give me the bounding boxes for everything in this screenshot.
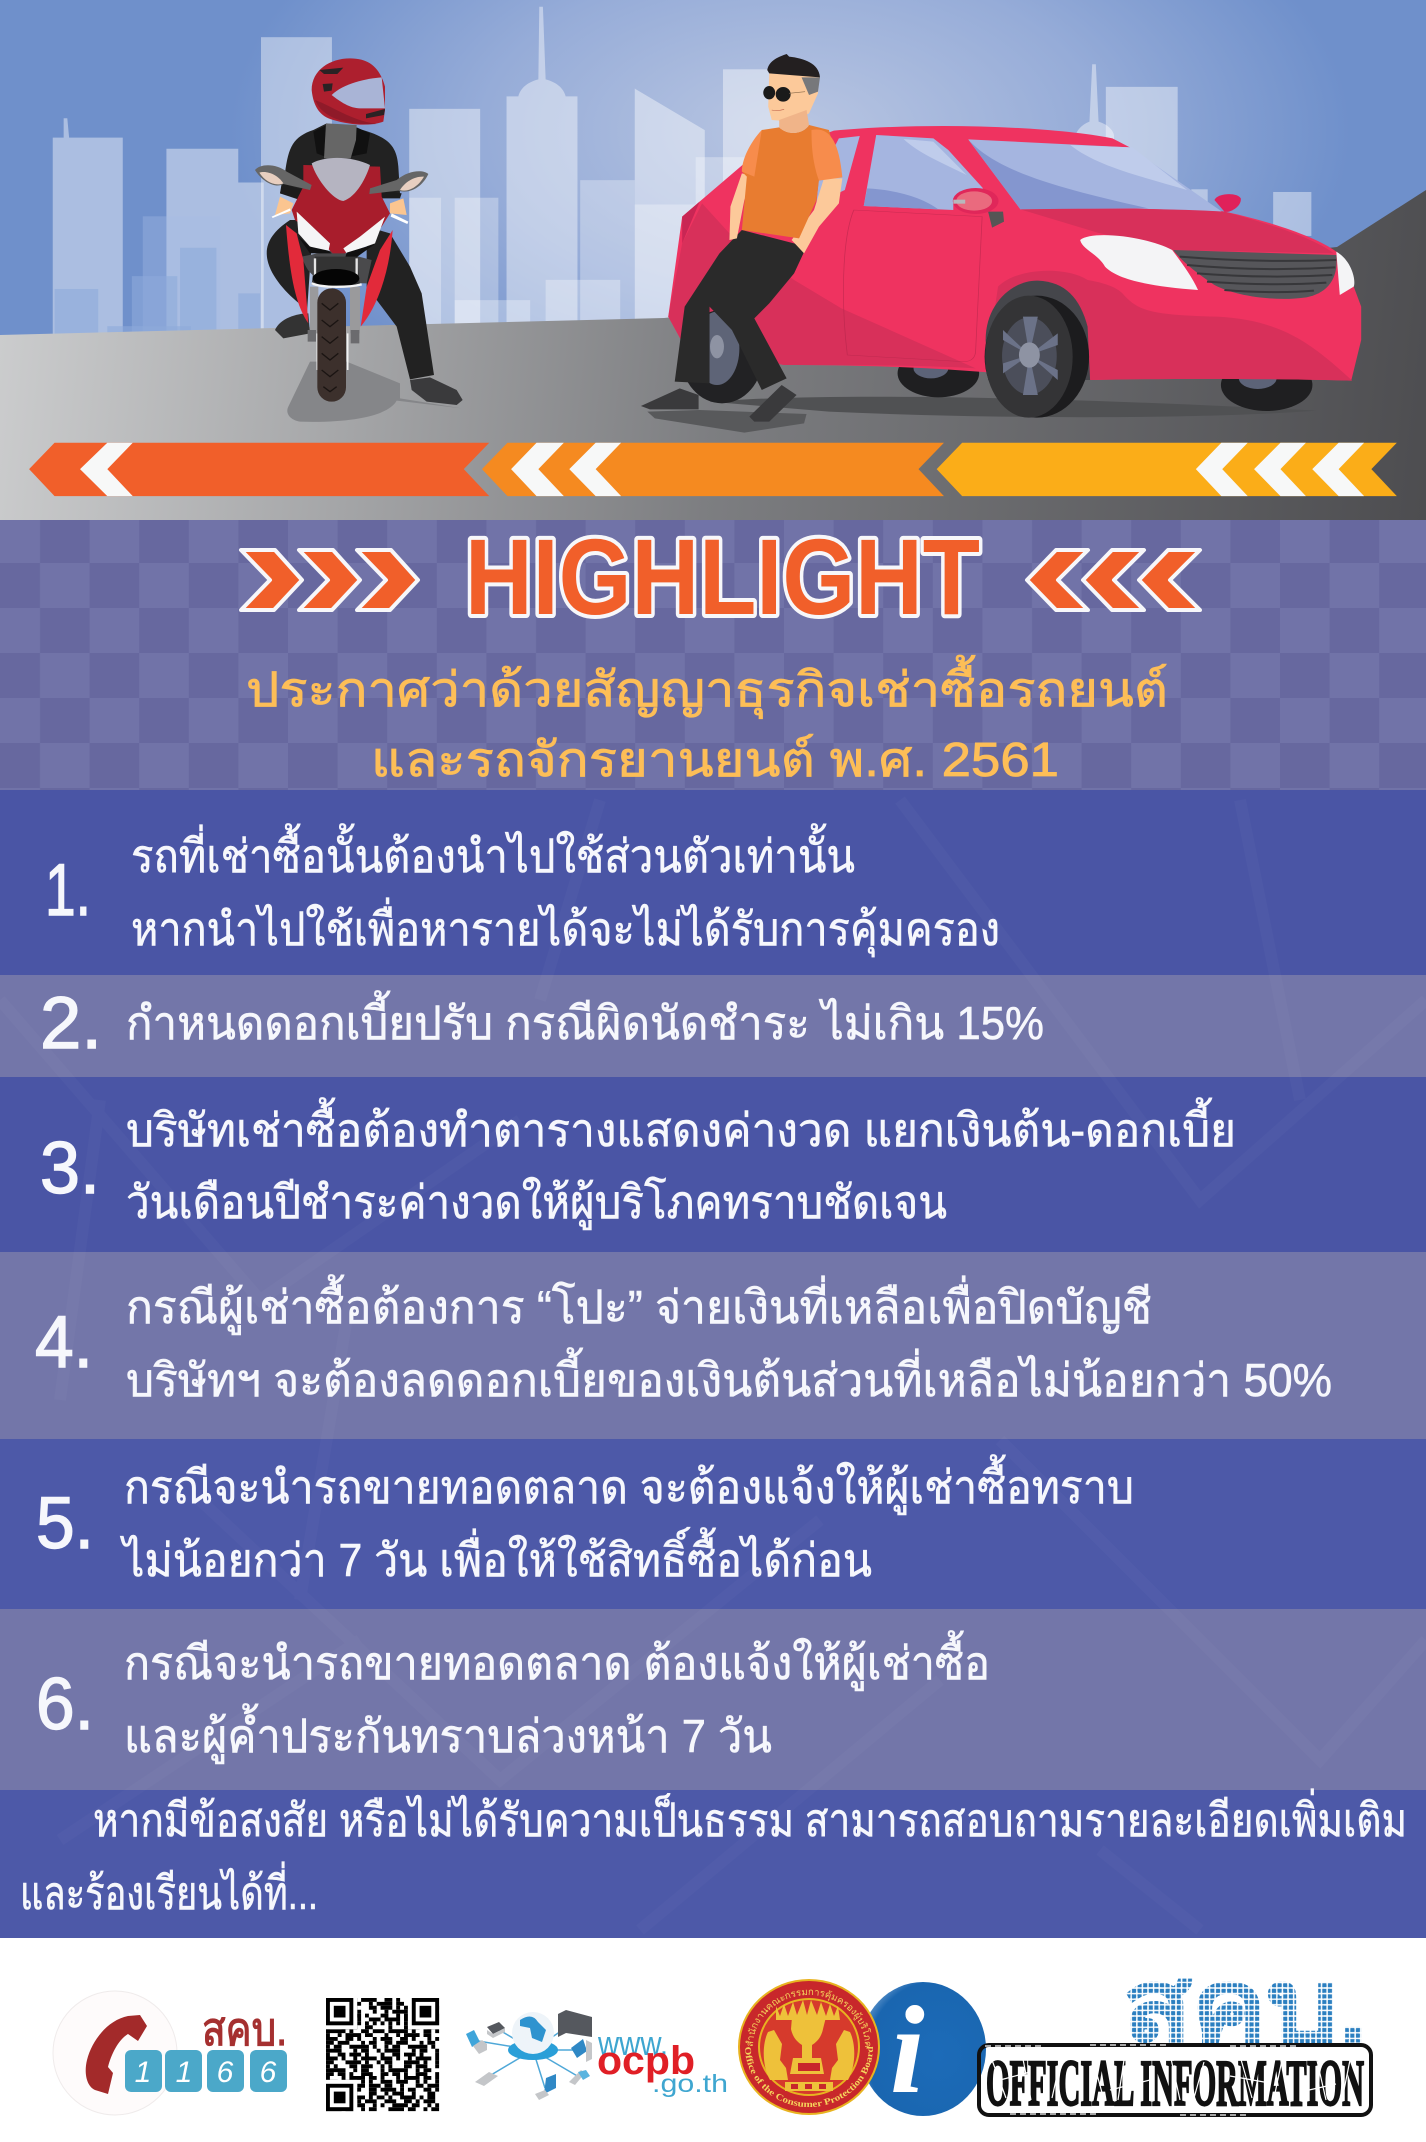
chevrons pointing right [241,550,418,610]
chevrons pointing left [1027,550,1200,610]
heading: HIGHLIGHT: HIGHLIGHT [465,516,980,637]
side mirror [953,188,1004,228]
motorcycle and rider [255,58,463,422]
consumer protection board seal [738,1979,880,2115]
item 5 [0,1439,1426,1609]
item 1: หากนำไปใช้เพื่อหารายได้จะไม่ได้รับการคุ้มครอง [131,897,1000,958]
grille [1173,250,1337,299]
logo: network globe: .go.th [652,2070,728,2098]
header panel: checkered highlight [0,516,1426,790]
hero illustration [0,0,1426,520]
footer logos [52,1950,1373,2120]
logo: hotline 1166 [53,1991,287,2115]
item 3: บริษัทเช่าซื้อต้องทำตารางแสดงค่างวด แยกเงินต้น-ดอกเบี้ย [126,1097,1236,1156]
seal emblem [764,2000,854,2091]
item 1: รถที่เช่าซื้อนั้นต้องนำไปใช้ส่วนตัวเท่านั้น [131,823,855,882]
logo: network globe [466,2010,728,2100]
item 3: วันเดือนปีชำระค่างวดให้ผู้บริโภคทราบชัดเจน [126,1176,947,1230]
logo: hotline 1166: 6 [260,2056,277,2089]
network devices [466,2010,592,2100]
item 6: 6. [36,1664,94,1745]
item 3: 3. [40,1128,100,1209]
logo: network globe: www. [597,2025,668,2063]
speed arrow stripe [29,443,1397,496]
OCPB dotted logotype: สคบ. [1123,1950,1369,2062]
rear wheel [681,310,763,403]
contact note: และร้องเรียนได้ที่... [20,1861,318,1919]
item 2: 2. [40,983,102,1064]
logo: hotline 1166: 1 [176,2056,192,2089]
consumer protection board seal: Office of the Consumer Protection Board [745,2046,873,2107]
item 5: ไม่น้อยกว่า 7 วัน เพื่อให้ใช้สิทธิ์ซื้อได้ก่อน [119,1527,872,1586]
item 6: และผู้ค้ำประกันทราบล่วงหน้า 7 วัน [124,1703,772,1764]
item 5: 5. [36,1483,94,1564]
item 4: กรณีผู้เช่าซื้อต้องการ “โปะ” จ่ายเงินที่เหลือเพื่อปิดบัญชี [126,1274,1152,1335]
sky background [0,0,1426,520]
front wheel [317,288,346,402]
road [0,190,1426,520]
logo: hotline 1166: 1 [135,2056,151,2089]
item 4: บริษัทฯ จะต้องลดดอกเบี้ยของเงินต้นส่วนที่เหลือไม่น้อยกว่า 50% [126,1347,1332,1406]
consumer protection board seal: สำนักงานคณะกรรมการคุ้มครองผู้บริโภค [746,1990,872,2047]
item 3 [0,1077,1426,1252]
city skyline [53,7,1311,335]
title line 1: ประกาศว่าด้วยสัญญาธุรกิจเช่าซื้อรถยนต์ [246,655,1168,719]
item 4 [0,1252,1426,1439]
title line 2: และรถจักรยานยนต์ พ.ศ. 2561 [371,734,1059,787]
info icon [860,1982,986,2120]
item 2 [0,975,1426,1077]
helmet [312,58,385,125]
man leaning on car [641,54,842,433]
red car [641,54,1361,433]
item 6: กรณีจะนำรถขายทอดตลาด ต้องแจ้งให้ผู้เช่าซื้อ [124,1630,990,1691]
front wheel [985,296,1089,418]
item 1 [0,790,1426,975]
item 4: 4. [35,1302,93,1383]
headlight [1080,235,1354,295]
logo: network globe: ocpb [597,2039,695,2083]
item 5: กรณีจะนำรถขายทอดตลาด จะต้องแจ้งให้ผู้เช่าซื้อทราบ [124,1454,1134,1515]
logo: hotline 1166: 6 [217,2056,234,2089]
item 2: กำหนดดอกเบี้ยปรับ กรณีผิดนัดชำระ ไม่เกิน 15% [126,990,1044,1049]
mirrors [255,165,428,194]
contact note [0,1788,1426,1938]
item 1: 1. [45,850,91,931]
QR code [326,1998,439,2111]
info icon: i [890,1982,925,2120]
item 6 [0,1609,1426,1790]
logo: hotline 1166: สคบ. [202,2003,287,2055]
